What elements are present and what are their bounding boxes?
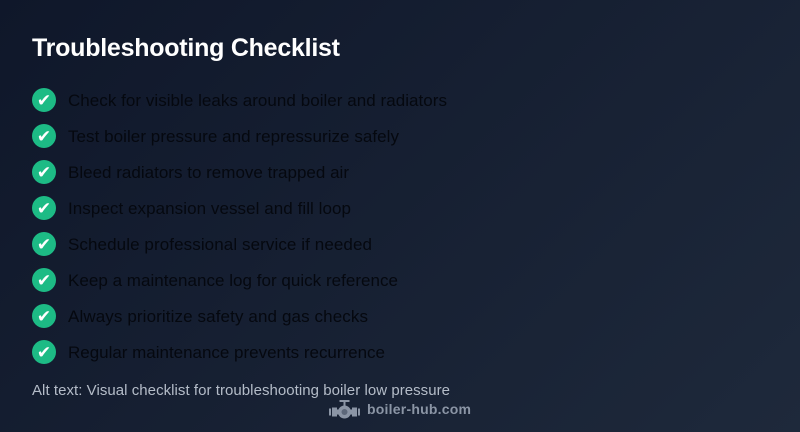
checklist item 7: Always prioritize safety and gas checks — [68, 307, 368, 326]
checklist item 2: Test boiler pressure and repressurize safely — [68, 127, 400, 146]
checklist item 5: Schedule professional service if needed — [68, 235, 372, 254]
alt text caption: Alt text: Visual checklist for troubleshooting boiler low pressure — [32, 382, 450, 399]
checklist item 4: ✔ — [37, 199, 51, 219]
checklist item 3: ✔ — [37, 163, 51, 183]
brand name: boiler-hub.com — [367, 401, 471, 417]
checklist item 7: ✔ — [37, 307, 51, 327]
checklist item 3: Bleed radiators to remove trapped air — [68, 163, 349, 182]
icon: pipe valve — [329, 400, 360, 418]
checklist item 5: ✔ — [37, 235, 51, 255]
title: Troubleshooting Checklist — [32, 34, 341, 62]
checklist item 2: ✔ — [37, 127, 51, 147]
checklist — [32, 88, 447, 364]
checklist item 4: Inspect expansion vessel and fill loop — [68, 199, 351, 218]
checklist item 1: Check for visible leaks around boiler and radiators — [68, 91, 447, 110]
checklist item 8: ✔ — [37, 343, 51, 363]
checklist item 6: Keep a maintenance log for quick reference — [68, 271, 398, 290]
checklist item 6: ✔ — [37, 271, 51, 291]
checklist item 8: Regular maintenance prevents recurrence — [68, 343, 385, 362]
checklist item 1: ✔ — [37, 91, 51, 111]
